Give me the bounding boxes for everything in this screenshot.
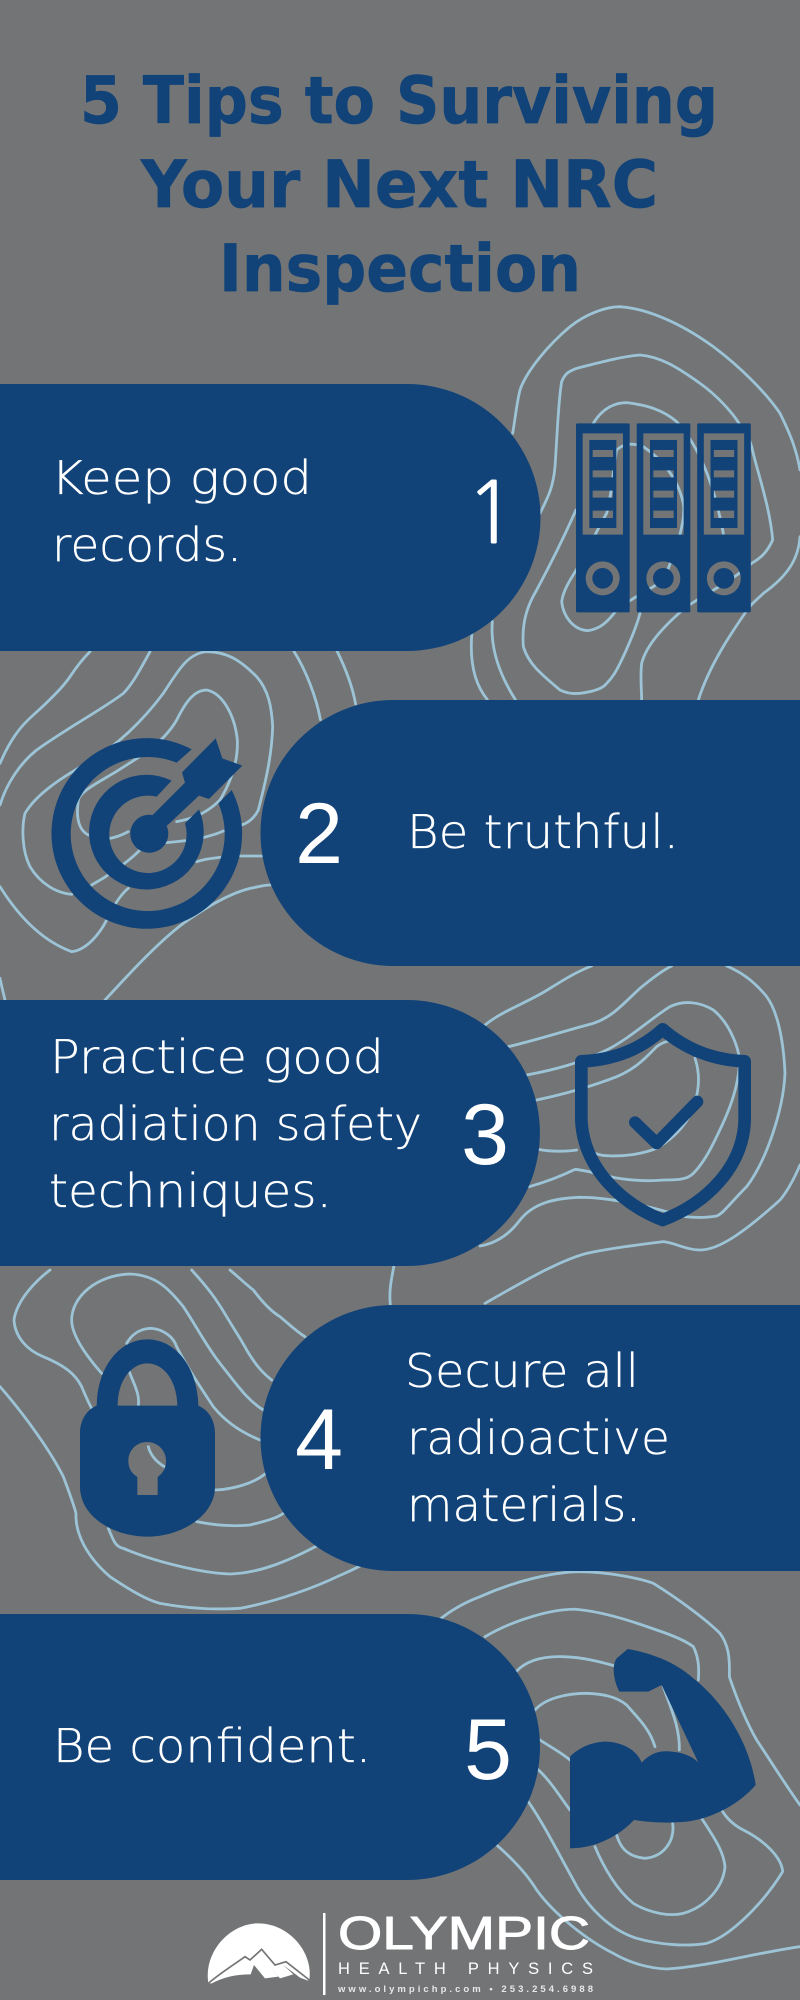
tip 3 text: radiation safety [49,1097,422,1151]
title: 5 Tips to Surviving [80,64,718,139]
tip 5 number: 5 [464,1702,512,1798]
tip 3 number: 3 [461,1087,509,1183]
panel: tip 4 [261,1305,800,1571]
logo: Olympic Health Physics: OLYMPIC [338,1907,590,1959]
panel: tip 2 [261,700,800,966]
icon: flexed bicep [570,1649,756,1848]
icon: binders [576,423,751,612]
tip 3 text [49,1030,422,1218]
tip 3 text: Practice good [50,1030,384,1084]
tip 5 text: Be confident. [53,1719,371,1773]
tip 1 text: Keep good [51,451,312,505]
tip 4 text: materials. [407,1478,641,1532]
tip 4 text: radioactive [407,1411,670,1465]
logo mark: dome and mountains [208,1923,311,1990]
panel: tip 5 [0,1614,540,1880]
title: Inspection [219,232,581,307]
tip 4 text: Secure all [405,1344,639,1398]
logo: Olympic Health Physics [208,1907,593,1995]
icon: shield with check [581,1029,745,1220]
tip 4 text [405,1344,670,1532]
logo: Olympic Health Physics: HEALTH PHYSICS [338,1960,593,1978]
tip 3 text: techniques. [49,1164,332,1218]
logo: Olympic Health Physics: www.olympichp.com • 253.254.6988 [337,1984,593,1995]
icon: padlock [80,1339,215,1537]
icon: target with arrow [51,738,242,929]
title [80,64,718,307]
tip 2 number: 2 [295,786,343,882]
tip 1 text: records. [52,518,242,572]
title: Your Next NRC [140,148,658,223]
tip 1 number: 1 [465,470,517,556]
tip 1 text [51,451,312,572]
panel: tip 3 [0,1000,540,1266]
tip 2 text: Be truthful. [407,805,679,859]
panel: tip 1 [0,384,540,651]
tip 4 number: 4 [295,1392,343,1488]
